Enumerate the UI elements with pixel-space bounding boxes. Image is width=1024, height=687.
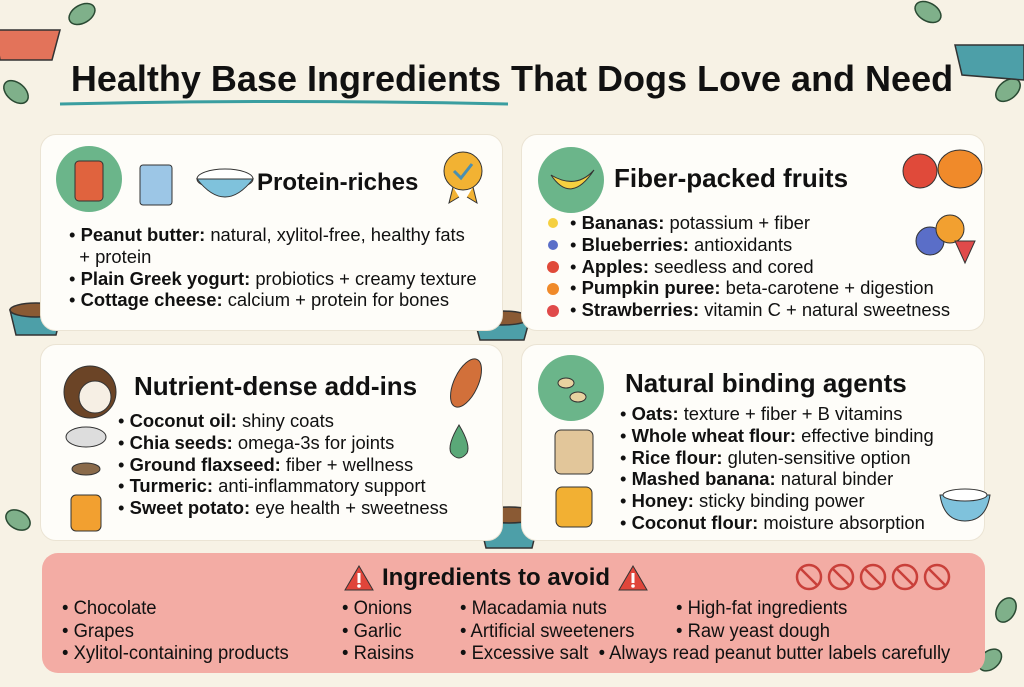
avoid list columns: • Grapes: [62, 620, 134, 642]
icon: coconut: [64, 366, 116, 418]
bullet list: [118, 410, 448, 518]
bullet list: • Honey: sticky binding power: [620, 490, 865, 511]
bullet list: • Apples: seedless and cored: [570, 256, 814, 277]
heading: Natural binding agents: [625, 368, 907, 398]
icons: prohibited: [796, 564, 950, 590]
bullet list: • Sweet potato: eye health + sweetness: [118, 497, 448, 518]
bullet list: • Pumpkin puree: beta-carotene + digestion: [570, 277, 934, 298]
panel: ingredients to avoid: • Garlic: [342, 620, 402, 642]
panel: ingredients to avoid: • Macadamia nuts: [460, 598, 607, 619]
bullet list: • Oats: texture + fiber + B vitamins: [620, 403, 902, 424]
heading: Protein-riches: [257, 169, 418, 196]
heading: Fiber-packed fruits: [614, 163, 848, 193]
panel: ingredients to avoid: • High-fat ingredients: [676, 598, 847, 619]
avoid list columns: • Xylitol-containing products: [62, 643, 289, 664]
panel: ingredients to avoid: • Onions: [342, 598, 412, 619]
bullet list: • Mashed banana: natural binder: [620, 468, 893, 489]
bullet list: • Chia seeds: omega-3s for joints: [118, 432, 394, 453]
icon: bananas: [538, 147, 604, 213]
icons: seeds, turmeric: [66, 426, 106, 532]
bullet list: + protein: [79, 246, 151, 267]
panel: ingredients to avoid: • Excessive salt • Always read peanut butter labels carefully: [460, 643, 950, 664]
bullet list: • Turmeric: anti-inflammatory support: [118, 475, 426, 496]
bullet list: • Rice flour: gluten-sensitive option: [620, 447, 911, 468]
icon: oil drop: [450, 424, 468, 458]
panel: ingredients to avoid: • Artificial sweeteners: [460, 620, 634, 642]
icon: flour bowl: [939, 488, 991, 522]
bullet list: • Cottage cheese: calcium + protein for bones: [69, 289, 449, 310]
bullet list: • Coconut oil: shiny coats: [118, 410, 334, 431]
icons: peanut butter, yogurt, cottage cheese: [56, 146, 254, 212]
bullet list: • Peanut butter: natural, xylitol-free, healthy fats: [69, 224, 465, 245]
avoid list columns: • Chocolate: [62, 598, 157, 619]
bullet list: • Bananas: potassium + fiber: [570, 212, 810, 233]
icon: sweet potato: [450, 358, 482, 408]
heading: Nutrient-dense add-ins: [134, 371, 417, 401]
bullet list: [69, 224, 477, 310]
panel: protein-riches: [40, 134, 503, 331]
bullet list: • Whole wheat flour: effective binding: [620, 425, 934, 446]
bullet list: [620, 403, 934, 533]
panel: natural binding agents: [521, 344, 985, 541]
bullet list: • Coconut flour: moisture absorption: [620, 512, 925, 533]
icon: oats: [538, 355, 604, 421]
bullet list: • Blueberries: antioxidants: [570, 234, 792, 255]
bullet list: • Strawberries: vitamin C + natural sweetness: [570, 299, 950, 320]
panel: nutrient-dense add-ins: [40, 344, 503, 541]
title: Healthy Base Ingredients That Dogs Love and Need: [71, 58, 953, 99]
panel: ingredients to avoid: [42, 553, 985, 673]
bullet list: [570, 212, 950, 320]
icons: fruits: [902, 150, 982, 264]
small fruit icons: [547, 218, 559, 317]
avoid list columns: [62, 598, 289, 664]
title underline: [60, 100, 508, 106]
icon: badge: [444, 152, 482, 204]
bullet list: • Ground flaxseed: fiber + wellness: [118, 454, 413, 475]
panel: ingredients to avoid: • Raisins: [342, 643, 414, 664]
heading: Ingredients to avoid: [382, 564, 610, 591]
panel: ingredients to avoid: • Raw yeast dough: [676, 620, 830, 642]
panel: fiber-packed fruits: [521, 134, 985, 331]
bullet list: • Plain Greek yogurt: probiotics + creamy texture: [69, 268, 477, 289]
icons: flour, honey: [554, 430, 594, 528]
